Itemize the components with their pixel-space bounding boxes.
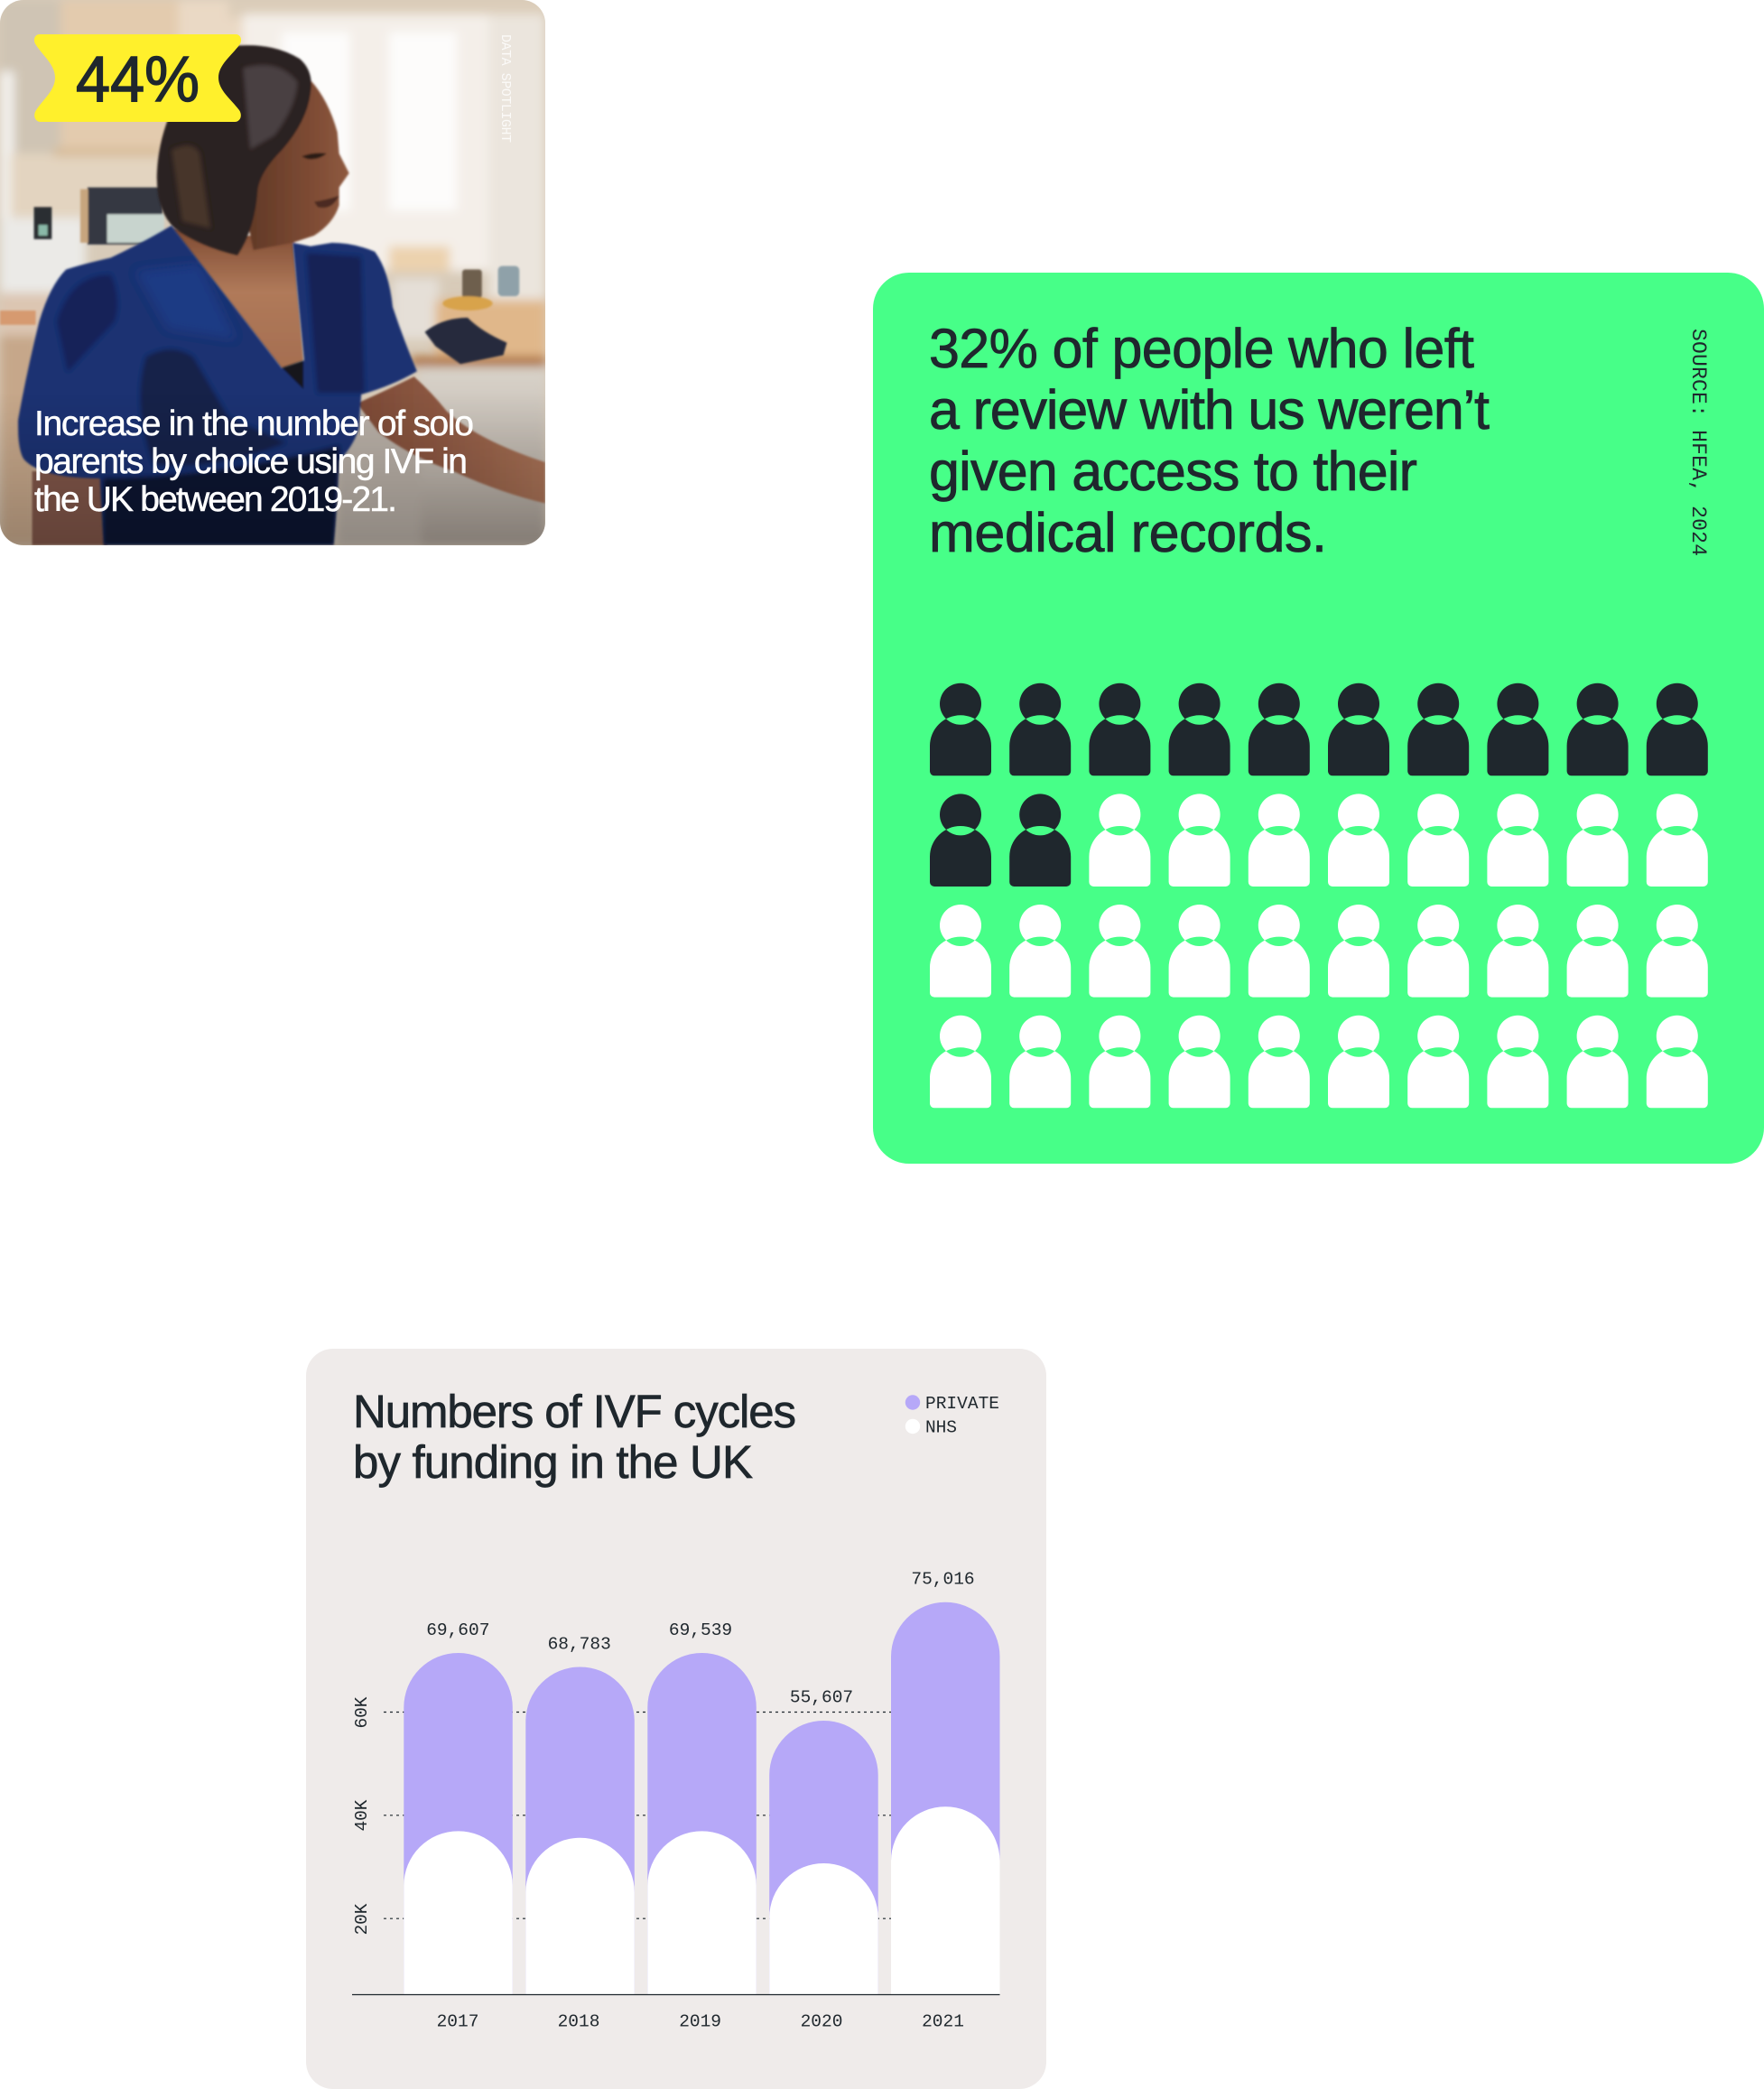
pictogram: 12 of 40 people dark [930, 683, 1708, 1108]
caption: the UK between 2019-21. [34, 480, 397, 519]
microwave and small objects [88, 188, 162, 245]
value labels: 68,783 [548, 1634, 611, 1654]
heading: a review with us weren’t [929, 379, 1490, 441]
year labels: 2021 [922, 2011, 964, 2031]
heading: medical records. [929, 502, 1327, 563]
photo: woman in blue dress in a kitchen [0, 0, 546, 553]
legend [905, 1394, 999, 1437]
source label: SOURCE: HFEA, 2024 [1686, 329, 1710, 556]
year labels: 2019 [679, 2011, 721, 2031]
left arm [32, 471, 107, 545]
year labels [437, 2011, 964, 2031]
panel: IVF cycles bar chart card [306, 1349, 1046, 2089]
dress [16, 224, 419, 545]
chart title: Numbers of IVF cycles [353, 1386, 796, 1437]
label: data spotlight: DATA SPOTLIGHT [497, 34, 513, 143]
y axis labels: 20K [352, 1903, 372, 1936]
panel: medical records pictogram card [873, 273, 1764, 1164]
hair [157, 45, 311, 255]
bars: private [404, 1602, 1000, 1994]
year labels: 2017 [437, 2011, 478, 2031]
year labels: 2018 [558, 2011, 599, 2031]
right arm [357, 376, 545, 504]
value labels [426, 1569, 975, 1708]
heading: given access to their [929, 441, 1417, 502]
caption: Increase in the number of solo [34, 404, 474, 443]
chart title: by funding in the UK [353, 1436, 753, 1488]
panel: data spotlight photo card [0, 0, 546, 553]
value labels: 69,607 [426, 1620, 489, 1640]
neck and face [243, 80, 349, 250]
y axis labels [352, 1696, 372, 1936]
caption: parents by choice using IVF in [34, 442, 468, 481]
year labels: 2020 [801, 2011, 842, 2031]
caption [34, 404, 474, 519]
bars: NHS [404, 1806, 1000, 1994]
x axis [352, 1993, 1000, 1995]
badge: 44% yellow ticket: 44% [76, 44, 200, 116]
y axis labels: 60K [352, 1696, 372, 1728]
y axis labels: 40K [352, 1799, 372, 1831]
legend: PRIVATE [925, 1394, 999, 1414]
heading: 32% of people who left [929, 318, 1474, 379]
chart title [353, 1386, 796, 1488]
heading [929, 318, 1490, 563]
value labels: 55,607 [790, 1688, 853, 1708]
legend: NHS [925, 1417, 957, 1437]
chest skin [172, 228, 303, 369]
value labels: 75,016 [911, 1569, 975, 1589]
value labels: 69,539 [669, 1620, 732, 1640]
y axis gridlines [384, 1712, 999, 1918]
badge: 44% yellow ticket [34, 34, 241, 122]
